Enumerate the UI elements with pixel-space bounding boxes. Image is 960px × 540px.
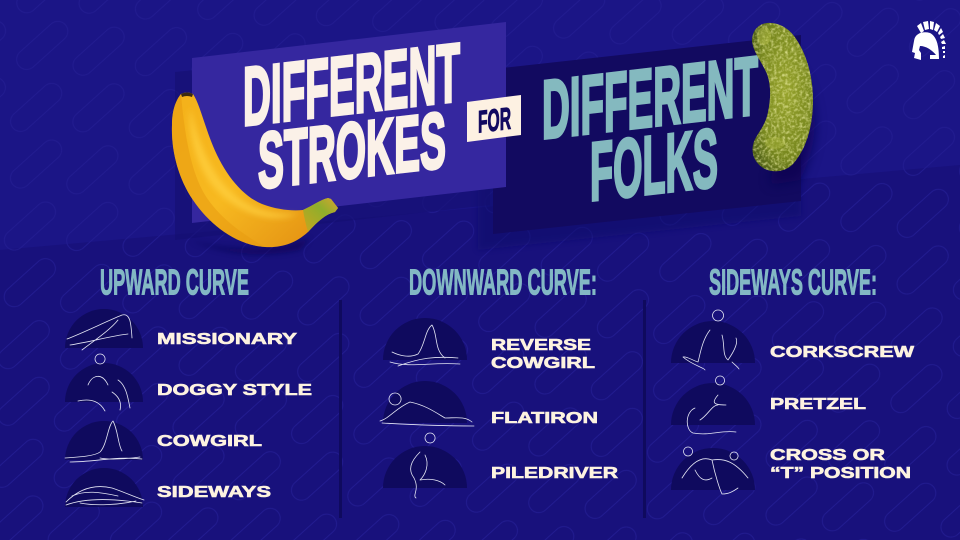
divider (643, 300, 646, 518)
item: corkscrew (671, 310, 914, 370)
label: cross or t position: “T” POSITION (770, 465, 911, 482)
icon: doggy style badge (65, 354, 143, 411)
heading: different folks (542, 39, 758, 224)
heading: different strokes (243, 26, 460, 207)
icon: pretzel badge (671, 376, 755, 434)
label: cross or t position: CROSS OR (770, 447, 885, 464)
tag: for: FOR (478, 101, 511, 140)
item: cowgirl (65, 421, 262, 462)
icon: pickle (748, 20, 816, 185)
label: reverse cowgirl: REVERSE (491, 337, 591, 354)
heading: different strokes: STROKES (258, 95, 446, 205)
icon: corkscrew badge (671, 310, 755, 370)
panel: different folks (478, 35, 801, 250)
item: corkscrew: CORKSCREW (770, 344, 914, 361)
icon: helmet logo (912, 21, 946, 60)
divider (339, 300, 342, 518)
item: missionary (65, 309, 298, 350)
item: flatiron: FLATIRON (491, 410, 598, 427)
icon: banana (172, 92, 338, 254)
item: piledriver (383, 433, 618, 498)
icon: sideways badge (65, 468, 144, 507)
item: sideways: SIDEWAYS (157, 484, 271, 501)
heading: upward curve: UPWARD CURVE (100, 262, 249, 302)
heading: different folks: FOLKS (590, 111, 718, 219)
tag: for (467, 95, 521, 142)
item: flatiron (380, 381, 598, 427)
column: upward curve (65, 262, 312, 507)
label: reverse cowgirl: COWGIRL (491, 355, 595, 372)
label: reverse cowgirl (491, 337, 595, 372)
title banner (172, 20, 816, 254)
heading: downward curve: DOWNWARD CURVE: (409, 262, 597, 302)
icon: cross position badge (671, 447, 755, 494)
item: missionary: MISSIONARY (157, 331, 298, 348)
icon: flatiron badge (380, 381, 474, 426)
item: doggy style (65, 354, 312, 411)
item: piledriver: PILEDRIVER (491, 465, 618, 482)
item: sideways (65, 468, 271, 507)
title banner: DIFFERENT (243, 26, 460, 143)
column: sideways curve (671, 262, 914, 494)
icon: missionary badge (65, 309, 143, 350)
item: doggy style: DOGGY STYLE (157, 382, 312, 399)
column: downward curve (380, 262, 618, 498)
item: cross or t position (671, 447, 911, 494)
label: cross or t position (770, 447, 911, 482)
item: pretzel: PRETZEL (770, 396, 866, 413)
item: reverse cowgirl (383, 318, 595, 372)
panel: different strokes (175, 22, 506, 240)
icon: cowgirl badge (65, 421, 143, 462)
icon: piledriver badge (383, 433, 467, 498)
item: cowgirl: COWGIRL (157, 433, 262, 450)
icon: reverse cowgirl badge (383, 318, 467, 366)
item: pretzel (671, 376, 866, 434)
